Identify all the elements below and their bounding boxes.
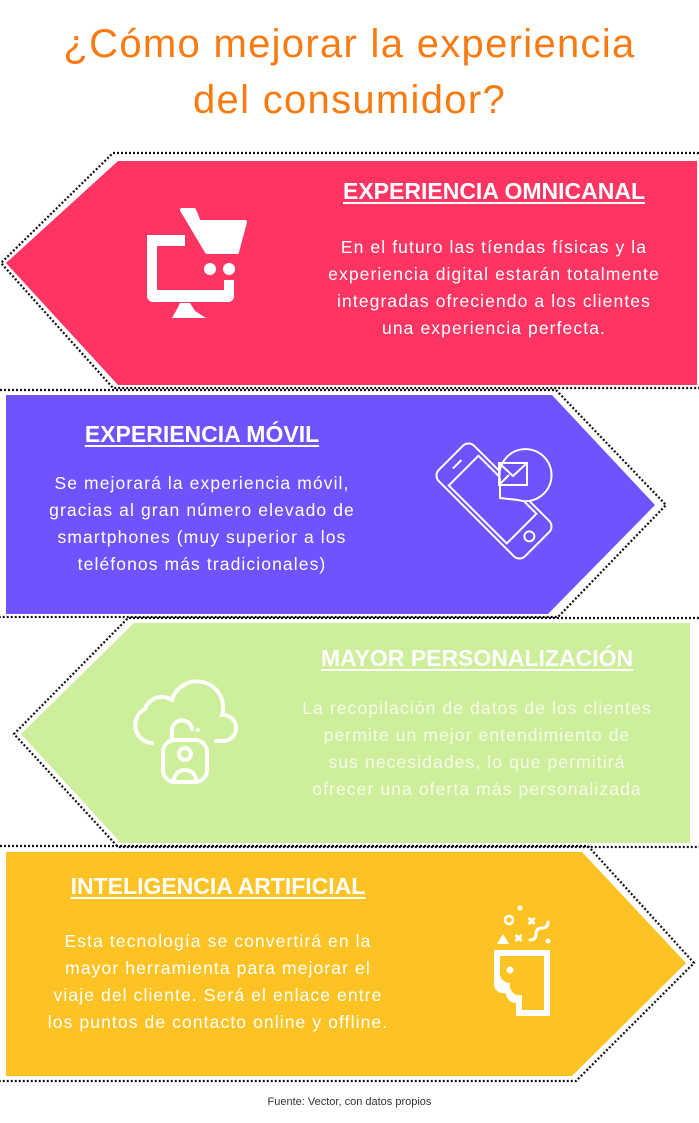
title bbox=[63, 22, 636, 122]
text: omnicanal: integradas ofreciendo a los clientes bbox=[337, 291, 651, 311]
text: personalizacion bbox=[302, 698, 652, 799]
icon: monitor cart bbox=[147, 210, 245, 318]
text: movil: gracias al gran número elevado de bbox=[49, 500, 355, 520]
icon: head ideas: ✖ bbox=[514, 933, 523, 945]
text: omnicanal: una experiencia perfecta. bbox=[382, 318, 606, 338]
text: personalizacion: ofrecer una oferta más personalizada bbox=[312, 779, 642, 799]
text: personalizacion: La recopilación de datos de los clientes bbox=[302, 698, 652, 718]
title: del consumidor? bbox=[193, 78, 506, 122]
icon: phone with message bbox=[433, 440, 555, 562]
text: inteligencia: Esta tecnología se convertirá en la bbox=[64, 931, 372, 951]
heading: personalizacion: MAYOR PERSONALIZACIÓN bbox=[321, 645, 633, 671]
text: movil: Se mejorará la experiencia móvil, bbox=[54, 473, 350, 493]
text: personalizacion: permite un mejor entendimiento de bbox=[324, 725, 630, 745]
text: omnicanal: En el futuro las tíendas físicas y la bbox=[341, 237, 647, 257]
text: inteligencia bbox=[48, 931, 388, 1032]
title: ¿Cómo mejorar la experiencia bbox=[63, 22, 636, 66]
icon: cloud lock bbox=[135, 681, 236, 782]
text: inteligencia: viaje del cliente. Será el enlace entre bbox=[54, 985, 382, 1005]
heading: omnicanal: EXPERIENCIA OMNICANAL bbox=[343, 178, 645, 204]
icon: head ideas bbox=[494, 906, 550, 1016]
panel: inteligencia bbox=[6, 852, 686, 1076]
text: movil: teléfonos más tradicionales) bbox=[78, 554, 326, 574]
text: omnicanal: experiencia digital estarán totalmente bbox=[328, 264, 660, 284]
text: movil: smartphones (muy superior a los bbox=[58, 527, 346, 547]
text: inteligencia: los puntos de contacto online y offline. bbox=[48, 1012, 388, 1032]
text: movil bbox=[49, 473, 355, 574]
heading: inteligencia: INTELIGENCIA ARTIFICIAL bbox=[71, 873, 365, 899]
heading: movil: EXPERIENCIA MÓVIL bbox=[85, 421, 319, 447]
panel: personalizacion bbox=[21, 623, 690, 843]
icon: head ideas: ✖ bbox=[527, 916, 536, 928]
text: omnicanal bbox=[328, 237, 660, 338]
text: personalizacion: sus necesidades, lo que permitirá bbox=[328, 752, 626, 772]
source: Fuente: Vector, con datos propios bbox=[268, 1096, 431, 1108]
panel: movil bbox=[6, 395, 655, 614]
panel: omnicanal bbox=[6, 161, 697, 385]
text: inteligencia: mayor herramienta para mejorar el bbox=[65, 958, 371, 978]
